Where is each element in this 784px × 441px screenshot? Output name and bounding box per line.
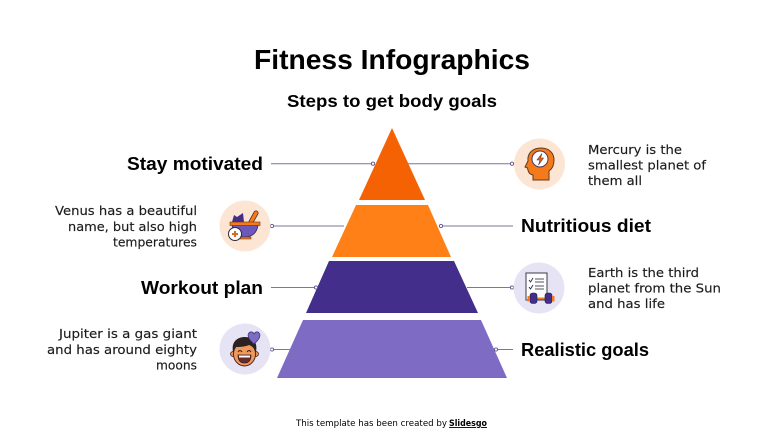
text: venus — [55, 203, 197, 250]
icon: head with lightning bolt — [514, 138, 565, 190]
subtitle: Steps to get body goals — [287, 91, 497, 111]
text: earth: Earth is the third — [588, 265, 699, 280]
connector: realistic goals — [494, 348, 513, 351]
text: venus: temperatures — [113, 234, 197, 250]
footer credit: Slidesgo — [449, 419, 487, 429]
text: earth: and has life — [588, 296, 665, 311]
heading: realistic goals: Realistic goals — [521, 339, 649, 360]
connector: earth — [467, 286, 514, 289]
pyramid tier 2 — [332, 205, 451, 257]
title: Fitness Infographics — [254, 44, 530, 75]
text: jupiter: Jupiter is a gas giant — [58, 326, 197, 341]
connector: nutritious diet — [439, 224, 513, 228]
connector: stay motivated — [271, 162, 375, 165]
text: mercury: Mercury is the — [588, 142, 682, 157]
connector: jupiter — [270, 348, 290, 351]
icon: checklist with dumbbell — [514, 262, 564, 314]
text: jupiter: moons — [156, 358, 197, 372]
text: venus: name, but also high — [68, 219, 197, 234]
text: earth: planet from the Sun — [588, 280, 721, 296]
pyramid tier 4 — [277, 320, 507, 378]
connector: workout plan — [271, 286, 318, 289]
heading: stay motivated: Stay motivated — [127, 153, 263, 174]
pyramid tier 3 — [306, 261, 478, 313]
text: mercury: smallest planet of — [588, 158, 707, 172]
text: jupiter — [47, 326, 198, 372]
text: earth — [588, 265, 721, 311]
pyramid tier 1 — [359, 128, 425, 200]
icon: laughing face with heart — [220, 324, 270, 374]
pyramid — [277, 128, 507, 378]
heading: nutritious diet: Nutritious diet — [521, 215, 651, 236]
text: mercury — [588, 142, 707, 188]
connector: mercury — [408, 162, 514, 165]
text: mercury: them all — [588, 173, 642, 188]
connector: venus — [270, 224, 344, 228]
text: venus: Venus has a beautiful — [55, 203, 197, 218]
footer credit: This template has been created by — [295, 419, 448, 429]
icon: mortar and pestle — [220, 200, 270, 252]
text: jupiter: and has around eighty — [47, 342, 198, 357]
heading: workout plan: Workout plan — [141, 277, 263, 298]
